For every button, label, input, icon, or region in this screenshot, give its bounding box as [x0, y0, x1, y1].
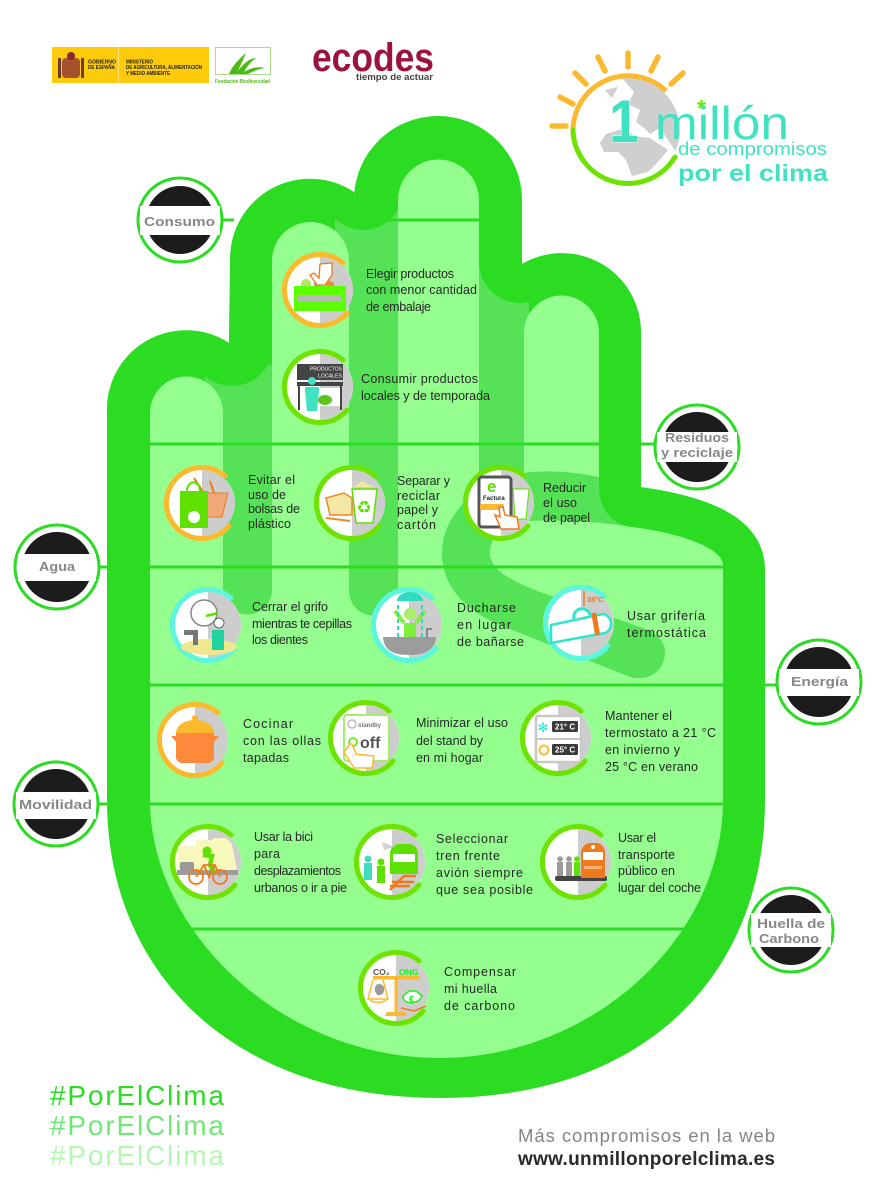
badge: Residuos y reciclaje: Residuos: [665, 431, 729, 445]
palm: [150, 444, 723, 1058]
text: Usar grifería: [627, 609, 706, 640]
icon: scales: ONG: [399, 967, 419, 977]
hashtags: #PorElClima: [50, 1140, 224, 1171]
logo: Ecodes: tiempo de actuar: [356, 72, 433, 83]
text: Reducir papel: el uso: [543, 496, 577, 510]
text: Usar transporte público: lugar del coche: [618, 881, 701, 895]
text: Elegir productos: [366, 267, 477, 314]
light fingers: [150, 160, 599, 480]
text: Seleccionar tren: que sea posible: [436, 883, 533, 897]
text: Seleccionar tren: Seleccionar: [436, 832, 508, 846]
hashtags: #PorElClima: [50, 1080, 224, 1111]
text: Usar grifería: Usar grifería: [627, 609, 705, 623]
badge: Energía: [777, 640, 861, 724]
icon: thermostat panel: ✻: [538, 720, 548, 735]
logo: Ecodes: ecodes: [312, 36, 434, 80]
badge: Huella de Carbono: Carbono: [759, 932, 819, 946]
icon: scales: CO₂: [373, 967, 390, 977]
badge: Huella de Carbono: Huella de: [757, 917, 825, 931]
text: Consumir productos: [361, 372, 490, 403]
icon: thermostatic tap: 38°C: [587, 595, 604, 604]
text: Minimizar stand by: del stand by: [416, 734, 484, 748]
text: Separar papel: reciclar: [397, 489, 440, 503]
text: Usar transporte público: público en: [618, 864, 675, 878]
text: Ducharse: en lugar: [457, 618, 511, 632]
badge: Energía: Energía: [791, 675, 849, 689]
green arc: [573, 130, 675, 183]
text: Elegir productos: con menor cantidad: [366, 283, 477, 297]
sun arc: [573, 76, 666, 130]
sun rays: [552, 53, 683, 126]
text: Evitar bolsas: uso de: [248, 488, 286, 502]
section dividers: [95, 220, 780, 929]
text: Mantener termostato: en invierno y: [605, 743, 681, 757]
hashtags: [50, 1080, 224, 1171]
finger shadows upper: [205, 205, 529, 475]
logo: Gobierno de España: DE AGRICULTURA, ALIMENTACIÓN: [126, 63, 202, 71]
text: Mantener termostato: 25 °C en verano: [605, 760, 698, 774]
text: Consumir productos: Consumir productos: [361, 372, 478, 386]
text: Elegir productos: Elegir productos: [366, 267, 454, 281]
footer: web link: [517, 1125, 775, 1170]
badge: Residuos y reciclaje: y reciclaje: [661, 446, 733, 460]
icon: standby off button: [330, 703, 399, 774]
finger webs: [191, 150, 561, 386]
text: Separar papel: papel y: [397, 503, 439, 517]
text: Seleccionar tren: [436, 832, 533, 897]
icon: crate of produce: [284, 255, 353, 326]
logo: Fundación Biodiversidad: Fundación Biodiversidad: [215, 79, 270, 85]
hand outline: [107, 116, 765, 1098]
text: Compensar huella: mi huella: [444, 982, 497, 996]
finger shadows over palm: [223, 444, 665, 678]
text: Compensar huella: [444, 965, 516, 1013]
text: Compensar huella: Compensar: [444, 965, 516, 979]
text: Usar la bici: para: [254, 847, 280, 861]
icon: thermostat panel: 21° C: [555, 722, 575, 732]
text: Usar transporte público: [618, 831, 701, 895]
icon: thermostat panel: 25° C: [555, 746, 575, 754]
logo: Gobierno de España: [52, 47, 209, 83]
text: Cerrar grifo: [252, 600, 352, 647]
logo: Gobierno de España: Y MEDIO AMBIENTE: [126, 71, 171, 77]
text: Cocinar: tapadas: [243, 751, 289, 765]
badge: Movilidad: [14, 762, 98, 846]
text: Cocinar: Cocinar: [243, 717, 293, 731]
text: Seleccionar tren: tren frente: [436, 849, 500, 863]
icon: scales: €: [409, 994, 414, 1004]
logo: 1 millón de compromisos por el clima: 1: [609, 88, 639, 155]
text: Reducir papel: [543, 481, 590, 525]
icon: local products stall: PRODUCTOS: [310, 366, 342, 372]
icon: thermostatic tap: [545, 588, 614, 659]
icon: standby off button: standby: [358, 723, 382, 729]
text: Minimizar stand by: en mi hogar: [416, 751, 483, 765]
badge: Movilidad: Movilidad: [19, 798, 92, 812]
text: Mantener termostato: termostato a 21 °C: [605, 726, 716, 740]
badge: Agua: [15, 525, 99, 609]
text: Reducir papel: Reducir: [543, 481, 586, 495]
text: Elegir productos: de embalaje: [366, 300, 431, 314]
text: Consumir productos: locales y de temporada: [361, 389, 490, 403]
text: Seleccionar tren: avión siempre: [436, 866, 523, 880]
logo: Fundación Biodiversidad: [215, 48, 270, 85]
icon: thermostat panel: [522, 703, 591, 774]
badge: Consumo: Consumo: [144, 215, 215, 229]
logo: 1 millón de compromisos por el clima: [552, 53, 828, 186]
icon: standby off button: off: [360, 735, 381, 752]
icon: pot with lid: [159, 705, 228, 776]
text: Separar papel: [397, 474, 451, 532]
icon: paper recycling: [316, 468, 385, 539]
icon: local products stall: [284, 352, 353, 423]
icon: scales: [360, 953, 429, 1024]
text: Separar papel: cartón: [397, 518, 436, 532]
badge: Consumo: [138, 178, 222, 262]
icon: local products stall: LOCALES: [318, 374, 342, 380]
text: Mantener termostato: Mantener el: [605, 709, 672, 723]
logo: 1 millón de compromisos por el clima: millón: [655, 97, 789, 149]
icon: brushing teeth: [172, 590, 241, 661]
icon: electronic bill tablet: Factura: [483, 496, 505, 502]
icon: globe: [600, 76, 682, 176]
text: Minimizar stand by: Minimizar el uso: [416, 716, 508, 730]
icon: bicycle: [172, 827, 241, 898]
icon: bag and basket: [166, 468, 235, 539]
text: Usar transporte público: transporte: [618, 848, 675, 862]
badge: Residuos y reciclaje: [655, 405, 739, 489]
text: Separar papel: Separar y: [397, 474, 451, 488]
hashtags: #PorElClima: [50, 1110, 224, 1141]
text: commitments: [243, 267, 716, 1013]
icon: paper recycling: ♻: [356, 498, 372, 518]
text: Evitar bolsas: plástico: [248, 517, 291, 531]
icon: train: [356, 827, 425, 898]
text: Usar la bici: urbanos o ir a pie: [254, 881, 347, 895]
text: Usar grifería: termostática: [627, 626, 706, 640]
text: Ducharse: Ducharse: [457, 601, 516, 615]
text: Usar transporte público: Usar el: [618, 831, 656, 845]
icon: electronic bill tablet: e: [487, 477, 496, 496]
text: Evitar bolsas: [248, 473, 300, 531]
text: Usar la bici: Usar la bici: [254, 830, 313, 844]
text: Reducir papel: de papel: [543, 511, 590, 525]
text: Ducharse: de bañarse: [457, 635, 524, 649]
footer: web link: Más compromisos en la web: [518, 1125, 775, 1146]
text: Compensar huella: de carbono: [444, 999, 515, 1013]
text: Cocinar: con las ollas: [243, 734, 321, 748]
logo: Gobierno de España: DE ESPAÑA: [88, 64, 115, 71]
icon: electronic bill tablet: [465, 468, 534, 539]
text: Evitar bolsas: bolsas de: [248, 502, 300, 516]
text: Mantener termostato: [605, 709, 716, 774]
text: Usar la bici: [254, 830, 347, 895]
text: Cerrar grifo: mientras te cepillas: [252, 617, 352, 631]
asterisk: *: [697, 95, 706, 121]
text: Usar la bici: desplazamientos: [254, 864, 341, 878]
logo: 1 millón de compromisos por el clima: por el clima: [678, 160, 828, 186]
badge: Agua: Agua: [39, 560, 76, 574]
text: Ducharse: [457, 601, 524, 649]
logo: Gobierno de España: GOBIERNO: [88, 60, 116, 66]
logo: 1 millón de compromisos por el clima: de compromisos: [678, 139, 827, 159]
logo: Gobierno de España: MINISTERIO: [126, 60, 153, 66]
text: Evitar bolsas: Evitar el: [248, 473, 295, 487]
text: Cocinar: [243, 717, 321, 765]
text: Cerrar grifo: Cerrar el grifo: [252, 600, 328, 614]
text: Minimizar stand by: [416, 716, 508, 765]
footer: web link: www.unmillonporelclima.es: [517, 1149, 775, 1170]
badge: Huella de Carbono: [749, 888, 833, 972]
icon: public bus: [542, 827, 611, 898]
text: Cerrar grifo: los dientes: [252, 633, 308, 647]
hand shape: [107, 116, 765, 1098]
icon: shower: [373, 590, 442, 661]
